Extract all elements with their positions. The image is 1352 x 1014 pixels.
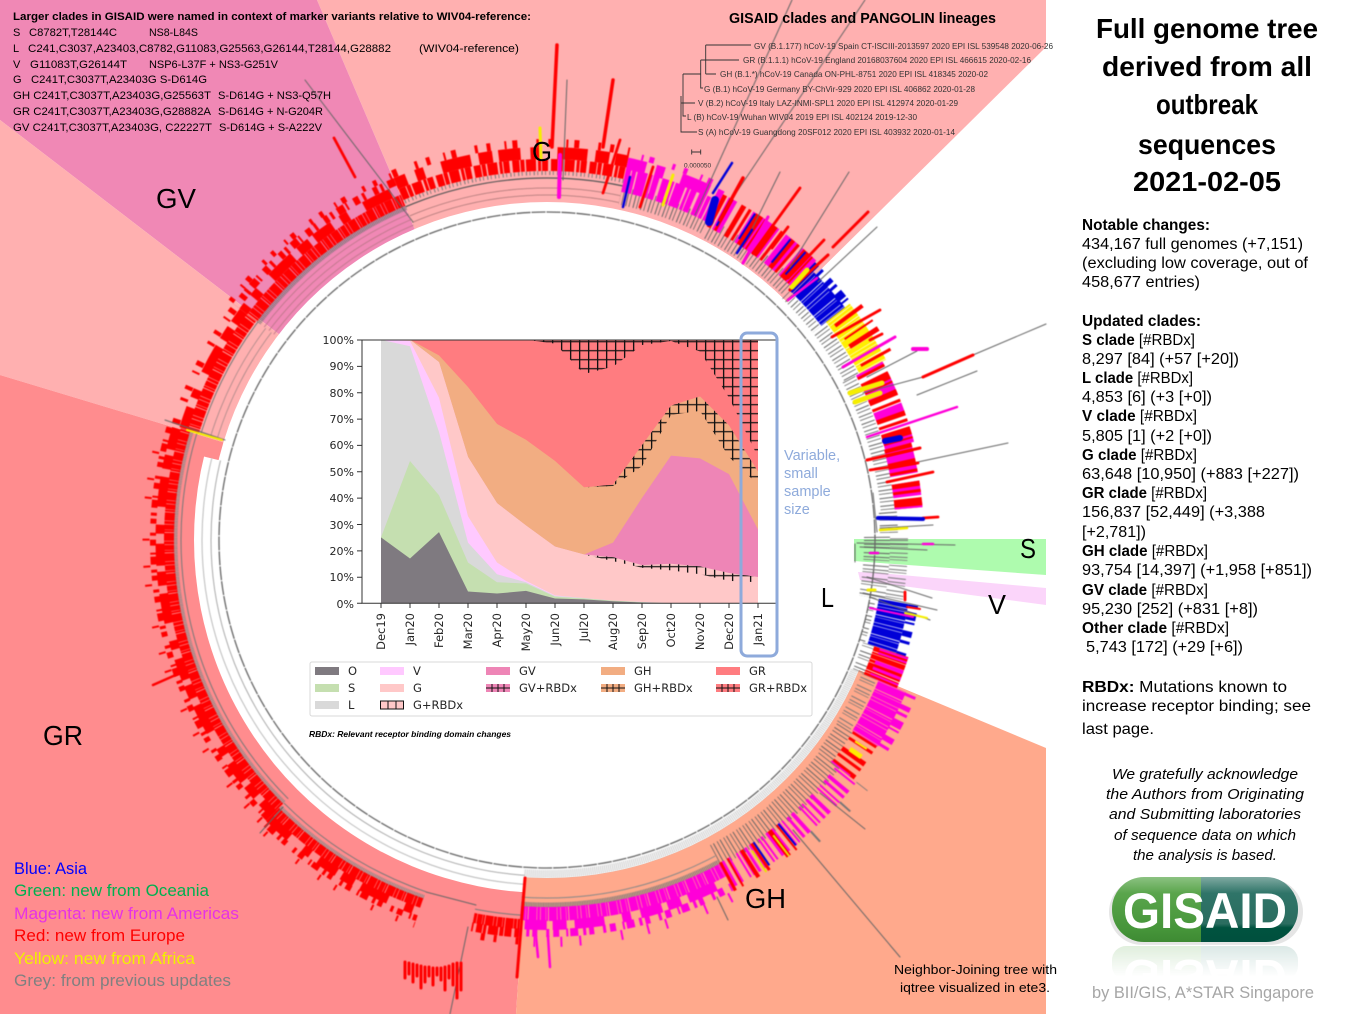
title: derived from all [1102, 51, 1312, 82]
text block: notable changes and clade counts: 95,230 [252] (+831 [+8]) [1082, 601, 1258, 618]
white band of lower left ring [194, 456, 524, 892]
header: marker variants text block: S-D614G + N-G204R [218, 106, 323, 118]
area: V [381, 340, 758, 603]
area: GH [381, 340, 758, 603]
clade labels [43, 136, 1036, 914]
clade labels: L [821, 582, 834, 613]
header: marker variants text block: C241,C3037,A23403,C8782,G11083,G25563,G26144,T28144,G28882 [28, 43, 391, 55]
hatch: GH+RBDx [584, 396, 758, 603]
text block: notable changes and clade counts: 5,743 [172] (+29 [+6]) [1086, 639, 1243, 656]
branches: GH yellow and red [818, 723, 878, 780]
legend: colour by region: Grey: from previous updates [14, 972, 231, 990]
note: tree method [894, 962, 1057, 995]
magenta long branches [536, 155, 957, 967]
x axis labels: Mar20 [461, 613, 475, 649]
note: tree method: iqtree visualized in ete3. [900, 980, 1050, 995]
branches: GV sector [228, 172, 414, 335]
annotation: variable small sample size: Variable, [784, 448, 840, 464]
chart legend: GH [634, 664, 652, 678]
x axis labels: Nov20 [693, 613, 707, 650]
text block: notable changes and clade counts [1082, 217, 1312, 738]
branches: GR bottom sector [470, 908, 521, 946]
clade labels: GV [156, 183, 196, 214]
reference tree: clade representatives: GH (B.1.*) hCoV-19 Canada ON-PHL-8751 2020 EPI ISL 418345 2020-02 [720, 70, 989, 79]
clade labels: S [1020, 533, 1036, 564]
branches: G sector red [390, 138, 632, 223]
chart legend: GV [519, 664, 536, 678]
text block: notable changes and clade counts: GR clade [#RBDx] [1082, 485, 1207, 502]
area: G [381, 340, 758, 603]
logo shadow [1109, 879, 1303, 945]
chart legend: L [348, 698, 355, 712]
area: G+RBDx [381, 340, 758, 603]
branches: GH mixed [710, 804, 801, 892]
chart legend: G+RBDx [413, 698, 463, 712]
x axis labels: May20 [519, 613, 533, 651]
text block: notable changes and clade counts: G clade [#RBDx] [1082, 447, 1197, 464]
wedge: GR clade [0, 375, 547, 1014]
text block: notable changes and clade counts: [+2,781]) [1082, 524, 1146, 541]
text block: notable changes and clade counts: Updated clades: [1082, 313, 1201, 330]
legend: colour by region: Red: new from Europe [14, 927, 185, 945]
y axis labels: 100% [323, 334, 354, 347]
logo pill [1112, 877, 1201, 942]
reference tree: clade representatives: G (B.1) hCoV-19 Germany BY-ChVir-929 2020 EPI ISL 406862 2020-01-28 [704, 85, 976, 94]
legend: colour by region [14, 860, 239, 990]
area: GR [381, 340, 758, 603]
logo reflection [1112, 946, 1298, 970]
chart legend: G [413, 681, 422, 695]
wedge: GH clade [516, 540, 1046, 1014]
text block: notable changes and clade counts: 434,167 full genomes (+7,151) [1082, 236, 1303, 253]
chart legend: GR+RBDx [749, 681, 807, 695]
chart legend: O [348, 664, 357, 678]
header: marker variants text block: (WIV04-reference) [419, 43, 519, 55]
branches: L grey [859, 536, 908, 600]
x axis labels: Jun20 [548, 613, 562, 647]
text block: notable changes and clade counts: (excluding low coverage, out of [1082, 255, 1309, 272]
chart legend: GR [749, 664, 766, 678]
grey long branches [165, 0, 1046, 1014]
branches: G sector magenta [618, 154, 725, 234]
chart areas [381, 340, 758, 603]
chart legend: GV+RBDx [519, 681, 577, 695]
y axis labels: 30% [330, 519, 354, 532]
clade labels: GH [745, 883, 786, 914]
annotation: variable small sample size [784, 448, 840, 518]
y axis labels: 80% [330, 387, 354, 400]
text block: acknowledgement: of sequence data on which [1114, 827, 1296, 844]
inner ring arcs [202, 195, 892, 885]
annotation: variable small sample size: sample [784, 484, 831, 500]
reference tree: clade representatives: GR (B.1.1.1) hCoV-19 England 20168037604 2020 EPI ISL 466615 2020-02-16 [743, 56, 1032, 65]
legend: colour by region: Magenta: new from Americas [14, 905, 239, 923]
text block: notable changes and clade counts: last page. [1082, 721, 1154, 738]
header: marker variants text block: V [13, 59, 21, 71]
header: marker variants text block: Larger clades in GISAID were named in context of marker variants relative to WIV04-reference: [13, 11, 531, 23]
wedge: GV clade [0, 0, 547, 540]
legend: colour by region: Green: new from Oceania [14, 882, 210, 900]
clade labels: G [532, 136, 552, 167]
blue long branches [623, 163, 923, 519]
sector backgrounds: clade wedges [0, 0, 1046, 1014]
y axis labels: 70% [330, 413, 354, 426]
area: O [381, 532, 758, 603]
branches: right upper [842, 360, 915, 451]
reference tree branches [681, 45, 751, 132]
header: marker variants text block: C241T,C3037T,A23403G S-D614G [31, 74, 207, 86]
branches: GH fan [768, 752, 868, 843]
detached red GR cluster [405, 962, 461, 998]
annotation: variable small sample size: size [784, 502, 810, 518]
text block: acknowledgement: the Authors from Originating [1106, 786, 1305, 803]
header: marker variants text block: G [13, 74, 22, 86]
logo: GISAID [1109, 877, 1303, 970]
reference tree: clade representatives: V (B.2) hCoV-19 Italy LAZ-INMI-SPL1 2020 EPI ISL 412974 2020-01-29 [698, 99, 959, 108]
chart legend: GH+RBDx [634, 681, 693, 695]
y axis labels: 20% [330, 545, 354, 558]
text block: notable changes and clade counts: GV clade [#RBDx] [1082, 582, 1208, 599]
header: marker variants text block: NSP6-L37F + NS3-G251V [149, 59, 279, 71]
x axis labels: Jul20 [577, 613, 591, 643]
y axis labels: 50% [330, 466, 354, 479]
reference tree: clade representatives: S (A) hCoV-19 Guangdong 20SF012 2020 EPI ISL 403932 2020-01-14 [698, 128, 956, 137]
annotation: variable small sample size: small [784, 466, 818, 482]
stacked area chart: clade share by month [310, 333, 840, 716]
header: marker variants text block: GR C241T,C3037T,A23403G,G28882A [13, 106, 212, 118]
logo reflection: GISAID [1123, 949, 1287, 1005]
reference tree: clade representatives: GV (B.1.177) hCoV-19 Spain CT-ISCIII-2013597 2020 EPI ISL 539548 2020-06-26 [754, 42, 1054, 51]
y axis labels: 10% [330, 571, 354, 584]
reference tree: clade representatives: 0.000050 [684, 162, 711, 170]
header: marker variants text block: L [13, 43, 19, 55]
branches: right lower [870, 442, 924, 511]
text block: notable changes and clade counts: 63,648 [10,950] (+883 [+227]) [1082, 466, 1299, 483]
branches: GR sector [142, 426, 289, 824]
text block: notable changes and clade counts: increase receptor binding; see [1082, 698, 1311, 715]
heading: GISAID clades and PANGOLIN lineages: GISAID clades and PANGOLIN lineages [729, 11, 996, 27]
credit line: by BII/GIS, A*STAR Singapore [1092, 984, 1314, 1002]
x axis labels: Apr20 [490, 613, 504, 648]
hatch: GR+RBDx [381, 340, 758, 603]
text block: notable changes and clade counts: GH clade [#RBDx] [1082, 543, 1208, 560]
long individual branches [153, 0, 1046, 1014]
text block: notable changes and clade counts: V clade [#RBDx] [1082, 408, 1197, 425]
text block: notable changes and clade counts: Notable changes: [1082, 217, 1210, 234]
branches: GH magenta cluster [836, 673, 916, 752]
clade labels: GR [43, 720, 83, 751]
area: GV [381, 340, 758, 603]
chart legend: V [413, 664, 421, 678]
branches: right end [878, 511, 898, 534]
x axis labels: Jan20 [403, 613, 417, 646]
y axis labels: 0% [337, 598, 354, 611]
wedge: S clade [854, 539, 1046, 575]
header: marker variants text block: GH C241T,C3037T,A23403G,G25563T [13, 90, 211, 102]
text block: notable changes and clade counts: S clade [#RBDx] [1082, 332, 1195, 349]
y axis labels: 90% [330, 360, 354, 373]
area: GH+RBDx [381, 340, 758, 603]
header: marker variants text block: S-D614G + S-A222V [219, 122, 323, 134]
text block: notable changes and clade counts: RBDx: Mutations known to [1082, 679, 1287, 696]
text block: notable changes and clade counts: 4,853 [6] (+3 [+0]) [1082, 389, 1212, 406]
text block: notable changes and clade counts: 458,677 entries) [1082, 274, 1200, 291]
reference tree: clade representatives [681, 42, 1054, 170]
chart axes [357, 340, 776, 608]
x axis labels: Jan21 [751, 613, 765, 646]
wedge: G clade [317, 0, 1046, 540]
x axis labels [374, 613, 765, 651]
area: L [381, 340, 758, 603]
branches: blue cluster [782, 262, 850, 332]
note: RBDx definition: RBDx: Relevant receptor binding domain changes [309, 729, 511, 739]
header: marker variants text block: C8782T,T28144C [29, 27, 117, 39]
header: marker variants text block: G11083T,G26144T [30, 59, 127, 71]
branches: GR lower sector [262, 802, 426, 928]
text block: acknowledgement [1106, 766, 1305, 864]
highlight box: Jan21 [741, 333, 777, 656]
text block: acknowledgement: the analysis is based. [1133, 847, 1277, 864]
branches: GH magenta band [518, 855, 734, 948]
hatch: G+RBDx [584, 555, 758, 603]
chart legend [310, 662, 812, 716]
scale bar [692, 150, 701, 154]
x axis labels: Oct20 [664, 613, 678, 648]
branches: L red [852, 642, 910, 689]
branches: left band [172, 306, 272, 438]
x axis labels: Dec20 [722, 613, 736, 650]
x axis labels: Feb20 [432, 613, 446, 648]
area: S [381, 461, 758, 603]
text block: notable changes and clade counts: L clade [#RBDx] [1082, 370, 1193, 387]
logo wordmark: GISAID [1123, 883, 1287, 939]
y axis labels: 60% [330, 439, 354, 452]
title: outbreak [1156, 89, 1258, 120]
area: GR+RBDx [381, 340, 758, 603]
text block: notable changes and clade counts: Other clade [#RBDx] [1082, 620, 1229, 637]
title: 2021-02-05 [1133, 166, 1281, 197]
red long branches [153, 45, 973, 977]
branches: mixed sector [704, 194, 817, 294]
wedge: V clade [858, 572, 1046, 605]
x axis labels: Dec19 [374, 613, 388, 650]
yellow long branches [187, 128, 927, 618]
text block: notable changes and clade counts: 156,837 [52,449] (+3,388 [1082, 504, 1265, 521]
title: sequences [1138, 129, 1276, 160]
header: marker variants text block: S [13, 27, 20, 39]
header: marker variants text block: NS8-L84S [149, 27, 198, 39]
y axis labels: 40% [330, 492, 354, 505]
chart legend: S [348, 681, 355, 695]
reference tree: clade representatives: L (B) hCoV-19 Wuhan WIV04 2019 EPI ISL 402124 2019-12-30 [687, 113, 918, 122]
text block: notable changes and clade counts: 5,805 [1] (+2 [+0]) [1082, 428, 1212, 445]
y axis labels [323, 334, 354, 611]
text block: acknowledgement: and Submitting laboratories [1109, 806, 1302, 823]
legend: colour by region: Yellow: new from Africa [14, 950, 196, 968]
x axis labels: Sep20 [635, 613, 649, 649]
text block: notable changes and clade counts: 93,754 [14,397] (+1,958 [+851]) [1082, 562, 1312, 579]
header: marker variants text block [13, 11, 531, 134]
branches: L blue [860, 597, 919, 657]
x axis labels: Aug20 [606, 613, 620, 650]
wedge: G clade left band [0, 120, 547, 540]
title: Full genome tree [1096, 13, 1318, 44]
header: marker variants text block: GV C241T,C3037T,A23403G, C22227T [13, 122, 212, 134]
radial phylogenetic tree ring [140, 133, 954, 947]
header: marker variants text block: S-D614G + NS3-Q57H [218, 90, 331, 102]
note: tree method: Neighbor-Joining tree with [894, 962, 1057, 977]
title [1096, 13, 1318, 197]
branches: yellow cluster [813, 303, 892, 382]
inner white disc [209, 202, 885, 878]
text block: acknowledgement: We gratefully acknowledge [1112, 766, 1298, 783]
clade labels: V [988, 589, 1006, 620]
text block: notable changes and clade counts: 8,297 [84] (+57 [+20]) [1082, 351, 1239, 368]
legend: colour by region: Blue: Asia [14, 860, 88, 878]
